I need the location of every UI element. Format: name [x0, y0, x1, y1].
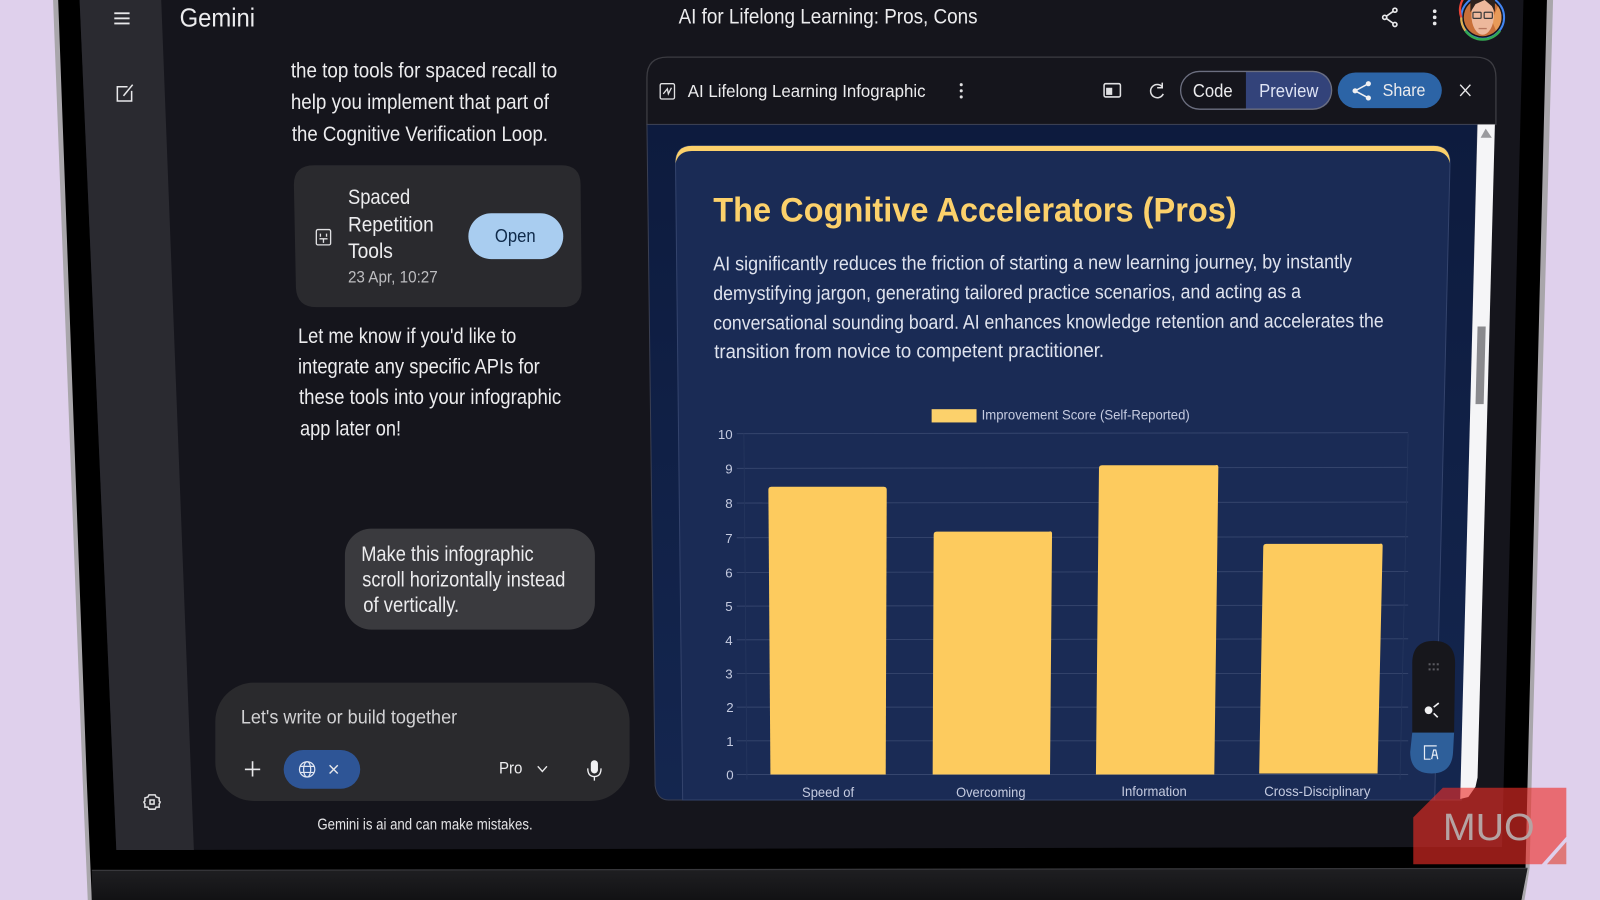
icon: microphone [588, 760, 601, 781]
description paragraph: AI significantly reduces the friction of starting a new learning journey, by instantly [713, 251, 1352, 275]
icon: text select [1424, 746, 1438, 759]
tool chip [284, 750, 360, 789]
chat text: intro paragraph: the Cognitive Verification Loop. [292, 123, 548, 146]
icon: settings [144, 795, 160, 809]
floating toolbar [1410, 641, 1455, 773]
y axis labels: 6 [725, 566, 733, 581]
open button: Open [495, 225, 536, 246]
bar chart [718, 407, 1408, 800]
avatar [1460, 0, 1504, 39]
document card [294, 165, 582, 307]
open button [468, 213, 563, 259]
disclaimer: Gemini is ai and can make mistakes. [317, 817, 533, 834]
y axis labels: 5 [725, 599, 733, 614]
description paragraph [713, 251, 1384, 363]
content card [676, 146, 1450, 800]
icon: plus [245, 761, 260, 777]
user message bubble: scroll horizontally instead [362, 569, 565, 592]
chat text: follow-up paragraph: app later on! [300, 418, 401, 441]
chat text: intro paragraph [291, 60, 557, 146]
description paragraph: transition from novice to competent practitioner. [714, 340, 1104, 363]
icon: connect nodes [1426, 703, 1439, 717]
scrollbar [1460, 124, 1495, 799]
card accent border [676, 146, 1450, 163]
user message bubble [345, 529, 595, 630]
chat text: follow-up paragraph [298, 325, 561, 441]
icon: grip dots [1429, 663, 1439, 670]
bars [768, 465, 1383, 774]
user message bubble: of vertically. [363, 594, 459, 617]
code preview toggle: Preview [1259, 80, 1319, 101]
model selector [499, 758, 547, 777]
icon: refresh [1151, 83, 1163, 98]
x axis labels: Overcoming [956, 785, 1026, 800]
model selector: Pro [499, 758, 522, 777]
y axis labels: 4 [725, 633, 733, 648]
sidebar [80, 0, 194, 850]
share button: Share [1383, 80, 1426, 100]
icon: close [1460, 85, 1470, 96]
chat text: follow-up paragraph: these tools into your infographic [299, 386, 561, 409]
code preview toggle: Code [1193, 80, 1233, 101]
card date: 23 Apr, 10:27 [348, 268, 438, 287]
heading: The Cognitive Accelerators (Pros) [713, 191, 1237, 229]
x axis labels: Cross-Disciplinary [1264, 784, 1371, 799]
card title: Tools [348, 240, 393, 263]
prompt input box [215, 683, 630, 801]
icon: more options top [1433, 9, 1437, 25]
panel title: AI Lifelong Learning Infographic [688, 81, 926, 101]
icon: share top [1383, 8, 1397, 27]
description paragraph: demystifying jargon, generating tailored practice scenarios, and acting as a [713, 281, 1302, 305]
chat text: intro paragraph: the top tools for spaced recall to [291, 60, 557, 83]
chat text: follow-up paragraph: integrate any specific APIs for [298, 355, 540, 378]
card title [348, 186, 434, 263]
y axis labels: 3 [725, 667, 733, 682]
card title: Spaced [348, 186, 410, 209]
code preview toggle [1181, 71, 1332, 109]
placeholder text: Let's write or build together [241, 706, 458, 728]
y axis labels: 0 [726, 768, 734, 783]
MUO watermark [1413, 788, 1566, 864]
y axis labels: 7 [725, 531, 733, 546]
user message bubble: Make this infographic [361, 543, 534, 566]
y axis labels: 1 [726, 734, 734, 749]
x axis labels: Information [1121, 784, 1187, 799]
y axis labels: 10 [718, 427, 733, 442]
x axis labels: Speed of [802, 785, 854, 800]
chart legend: Improvement Score (Self-Reported) [982, 407, 1190, 422]
icon: document [316, 230, 331, 245]
panel body background [647, 124, 1478, 800]
app name: Gemini [180, 5, 255, 33]
icon: new chat [117, 85, 133, 101]
description paragraph: conversational sounding board. AI enhances knowledge retention and accelerates the [713, 310, 1384, 335]
chat text: intro paragraph: help you implement that part of [291, 91, 549, 114]
preview panel [647, 57, 1496, 800]
icon: menu [114, 13, 130, 23]
y axis labels: 2 [726, 700, 734, 715]
icon: terminal [1104, 84, 1120, 97]
y axis labels [718, 427, 734, 783]
icon: infographic file [660, 84, 674, 99]
share button [1338, 72, 1442, 108]
chat text: follow-up paragraph: Let me know if you'd like to [298, 325, 516, 348]
MUO watermark: MUO [1443, 806, 1535, 849]
x axis labels [802, 784, 1371, 800]
panel header [647, 57, 1496, 124]
y axis labels: 9 [725, 461, 733, 476]
icon: panel menu [960, 83, 963, 98]
chat title: AI for Lifelong Learning: Pros, Cons [679, 5, 978, 28]
card title: Repetition [348, 214, 434, 237]
y axis labels: 8 [725, 496, 733, 511]
